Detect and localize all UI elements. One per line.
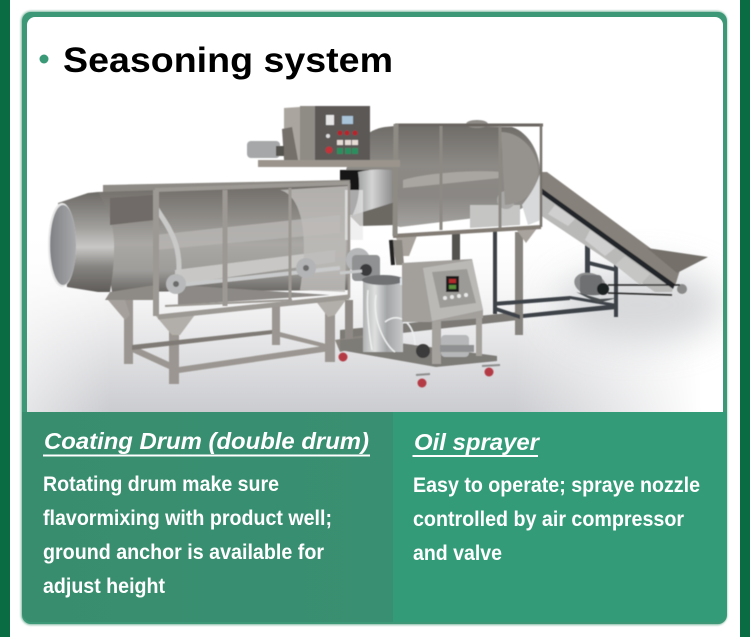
machine illustration [48,106,708,388]
casters [338,352,500,388]
title bullet [40,54,48,64]
product photo panel [27,17,725,412]
text: coating drum description [43,472,332,598]
text: oil sprayer description: Easy to operate; spraye nozzle [413,473,700,497]
right page stripe [740,0,750,637]
text: oil sprayer description [413,473,700,565]
text: coating drum description: ground anchor is available for [43,540,325,564]
right drum frame [393,124,543,236]
panel: oil sprayer [393,412,727,622]
oil sprayer control box [402,259,483,322]
left drum stand [108,297,365,384]
text: oil sprayer description: and valve [413,541,502,565]
heading: coating drum: Coating Drum (double drum) [44,428,369,454]
drum shaft and bearings [166,258,340,294]
oil sprayer motor [416,335,474,358]
heading: oil sprayer: Oil sprayer [414,429,540,455]
control cabinet [247,106,400,167]
text: oil sprayer description: controlled by air compressor [413,507,685,531]
oil sprayer base [340,318,497,367]
panel: coating drum [22,412,393,622]
title: Seasoning system [63,40,393,80]
left coating drum [48,180,363,305]
right coating drum [340,120,541,228]
text: coating drum description: adjust height [43,574,165,598]
right drum unit: rear stand [340,227,538,340]
text: coating drum description: flavormixing with product well; [43,506,332,530]
gear motor [340,240,393,281]
oil tank [362,275,415,352]
left page stripe [0,0,10,637]
conveyor support frame [493,240,618,319]
text: coating drum description: Rotating drum make sure [43,472,279,496]
conveyor motor [574,272,614,302]
floor shading [27,256,723,412]
conveyor [540,172,708,295]
left drum frame [155,183,349,317]
